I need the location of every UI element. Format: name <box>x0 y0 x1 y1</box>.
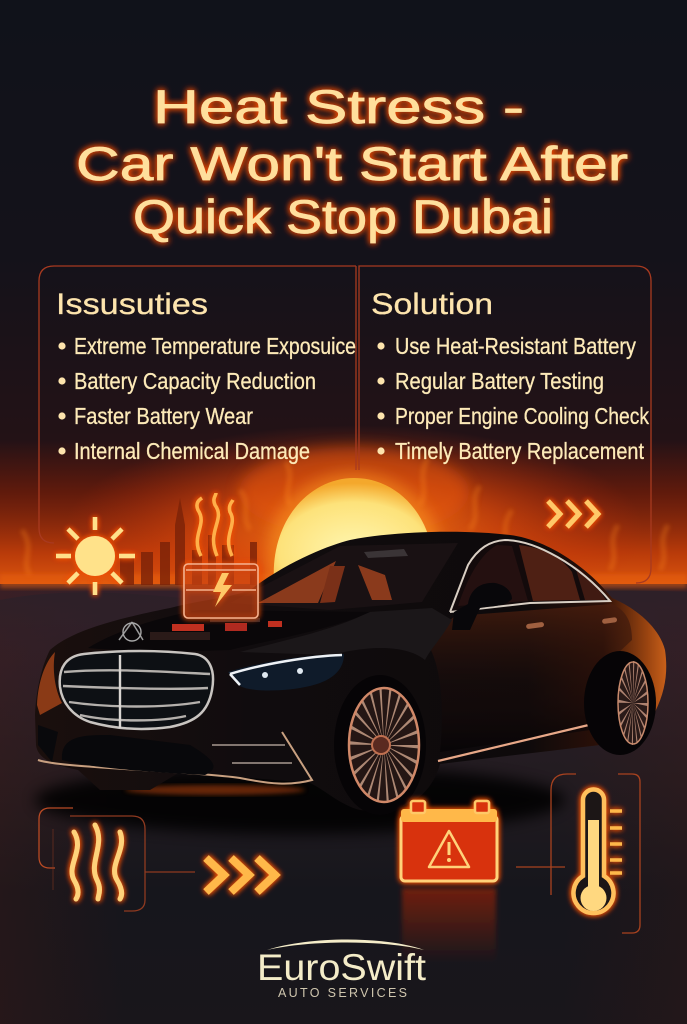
windshield <box>230 543 458 610</box>
front left reflection <box>37 652 62 715</box>
heading: issues: Issusuties <box>56 288 208 321</box>
list: issues: Battery Capacity Reduction <box>74 368 316 394</box>
title: Heat Stress - <box>153 80 524 133</box>
list: solution: Regular Battery Testing <box>395 368 604 394</box>
logo: EuroSwift Auto Services: AUTO SERVICES <box>278 986 407 1000</box>
logo: EuroSwift Auto Services <box>257 940 427 1000</box>
city skyline <box>120 498 257 585</box>
icon: heat waves above battery <box>197 493 233 556</box>
sun on the horizon <box>266 472 442 648</box>
fender <box>240 608 452 660</box>
icon: heat waves box <box>39 808 195 911</box>
title: Quick Stop Dubai <box>133 190 553 243</box>
door handles <box>526 617 617 629</box>
icon: sun <box>56 517 135 595</box>
mirror <box>452 583 512 630</box>
heading: solution: Solution <box>371 288 493 321</box>
icon: battery warning <box>401 801 497 881</box>
list: issues <box>58 333 356 464</box>
panel: solution <box>359 266 651 583</box>
icon: thermometer <box>516 774 640 933</box>
list: issues: Extreme Temperature Exposuice <box>74 333 356 359</box>
car <box>35 532 666 815</box>
icon: panel chevrons <box>548 501 598 527</box>
car body <box>35 532 666 811</box>
list: issues: Internal Chemical Damage <box>74 438 310 464</box>
rear wheel <box>584 651 656 755</box>
title <box>76 80 628 243</box>
list: solution: Use Heat-Resistant Battery <box>395 333 636 359</box>
sill line <box>438 723 597 761</box>
icon: battery charge box <box>184 564 258 618</box>
list: solution <box>377 333 649 464</box>
front wheel <box>334 675 426 815</box>
lower bumper <box>38 725 312 784</box>
list: solution: Timely Battery Replacement <box>395 438 645 464</box>
engine bay <box>88 610 370 651</box>
panel: issues <box>39 266 356 543</box>
reflection under battery <box>402 888 496 963</box>
title: Car Won't Start After <box>76 137 628 190</box>
headlight <box>228 654 344 690</box>
logo: EuroSwift Auto Services: EuroSwift <box>257 947 427 988</box>
side windows <box>450 540 610 612</box>
car side reflection <box>425 604 632 752</box>
icon: chevron arrows <box>206 858 275 892</box>
list: issues: Faster Battery Wear <box>74 403 253 429</box>
grille <box>60 651 213 729</box>
